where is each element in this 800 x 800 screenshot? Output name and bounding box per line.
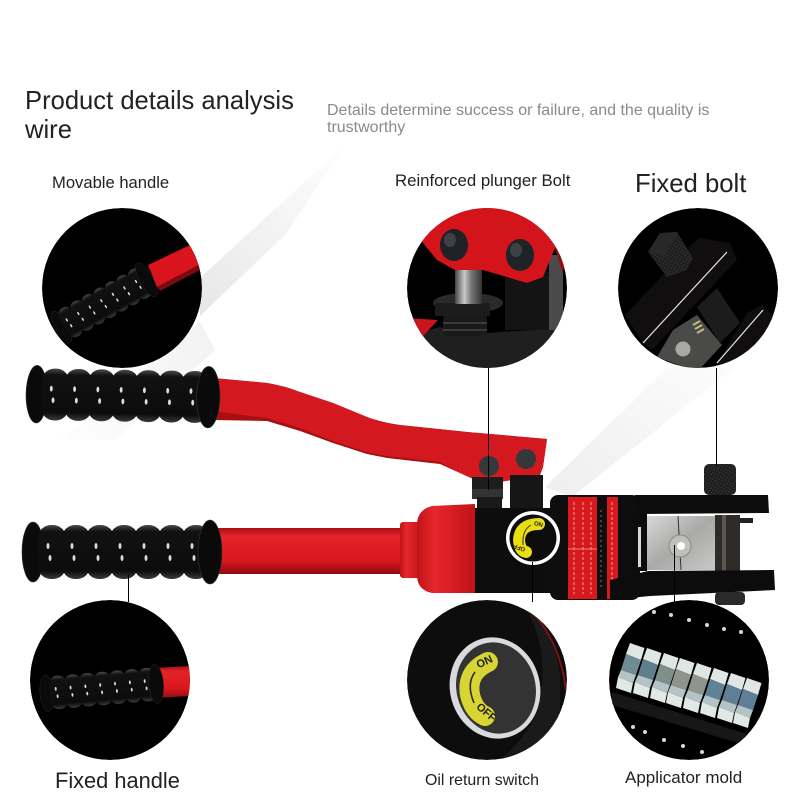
red label band [568, 497, 618, 599]
bracket [510, 475, 543, 513]
panel: fixed handle inset [30, 600, 190, 760]
inset crimp die blocks [616, 643, 762, 728]
panel: movable handle inset [42, 208, 202, 368]
inset knurled knob [648, 232, 693, 277]
subtitle: trustworthy [327, 119, 405, 136]
switch OFF text: OFF [513, 542, 526, 552]
die block [647, 516, 715, 570]
red collar [400, 522, 422, 578]
inset markings [693, 321, 704, 333]
inset pin [697, 288, 740, 343]
inset upper arm [625, 238, 737, 350]
OFF text: OFF [474, 701, 498, 725]
tool: hydraulic head [417, 464, 775, 605]
ON text: ON [475, 653, 495, 671]
yellow crescent [469, 662, 488, 716]
panel: applicator mold inset [609, 600, 769, 760]
label: movable handle: Movable handle [52, 173, 169, 192]
label: reinforced plunger bolt: Reinforced plunger Bolt [395, 171, 571, 190]
title: Product details analysis [25, 87, 294, 115]
label: applicator mold: Applicator mold [625, 768, 742, 787]
inset bottom dies row [631, 725, 704, 754]
red tube [205, 528, 402, 574]
inset red lever [148, 245, 200, 291]
jaw lower arm [610, 570, 775, 600]
jaw pin [715, 515, 753, 572]
jaw back plate [632, 513, 647, 571]
inset red tube [159, 666, 190, 698]
switch ring [450, 637, 540, 739]
panel: fixed bolt inset [618, 208, 778, 372]
pivot bolts [479, 449, 536, 476]
oil switch [506, 511, 560, 565]
jaw upper arm [635, 495, 769, 514]
red cap [417, 504, 475, 593]
panel: plunger bolt inset [405, 200, 570, 370]
label: fixed bolt: Fixed bolt [635, 170, 746, 198]
inset red plate [422, 208, 556, 283]
lower knob [715, 592, 745, 605]
plunger nut [472, 477, 503, 509]
title: wire [24, 116, 72, 144]
tool: top movable handle [25, 363, 547, 482]
rubber grip [25, 363, 221, 428]
subtitle: Details determine success or failure, and the quality is [327, 102, 709, 119]
inset thread and nut [433, 293, 503, 336]
red lever [213, 378, 547, 482]
tool: bottom fixed handle [22, 520, 422, 584]
black body [470, 508, 560, 593]
inset lower arm [718, 305, 772, 364]
label: fixed handle: Fixed handle [55, 768, 180, 793]
inset top dies row [652, 610, 743, 634]
background diagonal light stripes [60, 142, 735, 497]
switch ON text: ON [533, 521, 543, 529]
leader lines [128, 368, 716, 602]
label: oil return switch: Oil return switch [425, 772, 539, 789]
rubber grip [22, 520, 222, 584]
inset rubber grip [50, 262, 158, 344]
inset pillar [455, 268, 482, 304]
inset platform [612, 692, 750, 745]
inset bracket [505, 255, 563, 330]
inset body [420, 327, 556, 368]
inset rubber grip [38, 663, 165, 714]
knurled knob [704, 464, 736, 495]
inset metal block [657, 315, 722, 372]
inset bolts [440, 229, 534, 271]
cylinder [550, 495, 640, 600]
arrow marks [470, 672, 475, 703]
panel: oil return switch inset [407, 600, 567, 760]
